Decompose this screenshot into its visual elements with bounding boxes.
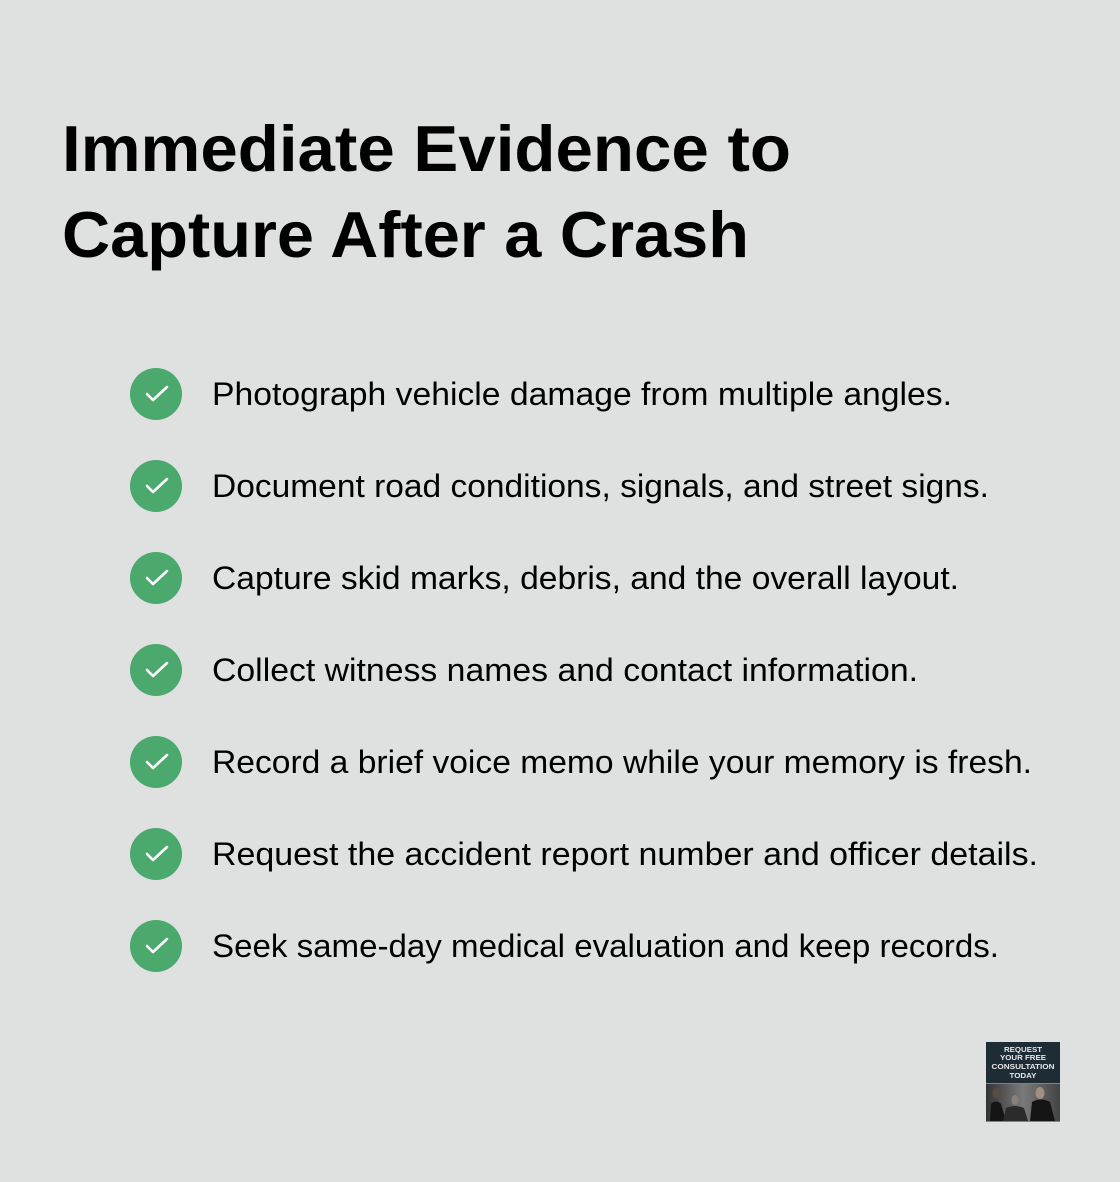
title: Immediate Evidence to <box>62 112 791 185</box>
item: seek medical evaluation <box>130 920 999 972</box>
item: photograph vehicle damage <box>130 368 952 420</box>
consultation badge: REQUEST <box>1004 1045 1042 1054</box>
consultation badge <box>986 1042 1060 1122</box>
item: request accident report <box>130 828 1038 880</box>
item: collect witness names <box>130 644 918 696</box>
checklist <box>130 368 1038 972</box>
item: document road conditions: Document road conditions, signals, and street signs. <box>212 468 989 504</box>
item: capture skid marks <box>130 552 959 604</box>
title <box>62 112 791 271</box>
item: capture skid marks: Capture skid marks, debris, and the overall layout. <box>212 560 959 596</box>
item: record voice memo <box>130 736 1032 788</box>
item: request accident report: Request the accident report number and officer details. <box>212 836 1038 872</box>
photo: three people <box>990 1087 1055 1121</box>
item: document road conditions <box>130 460 989 512</box>
item: photograph vehicle damage: Photograph vehicle damage from multiple angles. <box>212 376 952 412</box>
title: Capture After a Crash <box>62 198 749 271</box>
consultation badge: CONSULTATION <box>992 1062 1054 1071</box>
item: collect witness names: Collect witness names and contact information. <box>212 652 918 688</box>
item: record voice memo: Record a brief voice memo while your memory is fresh. <box>212 744 1032 780</box>
consultation badge: YOUR FREE <box>1000 1053 1046 1062</box>
item: seek medical evaluation: Seek same-day medical evaluation and keep records. <box>212 928 999 964</box>
consultation badge: TODAY <box>1010 1071 1036 1080</box>
